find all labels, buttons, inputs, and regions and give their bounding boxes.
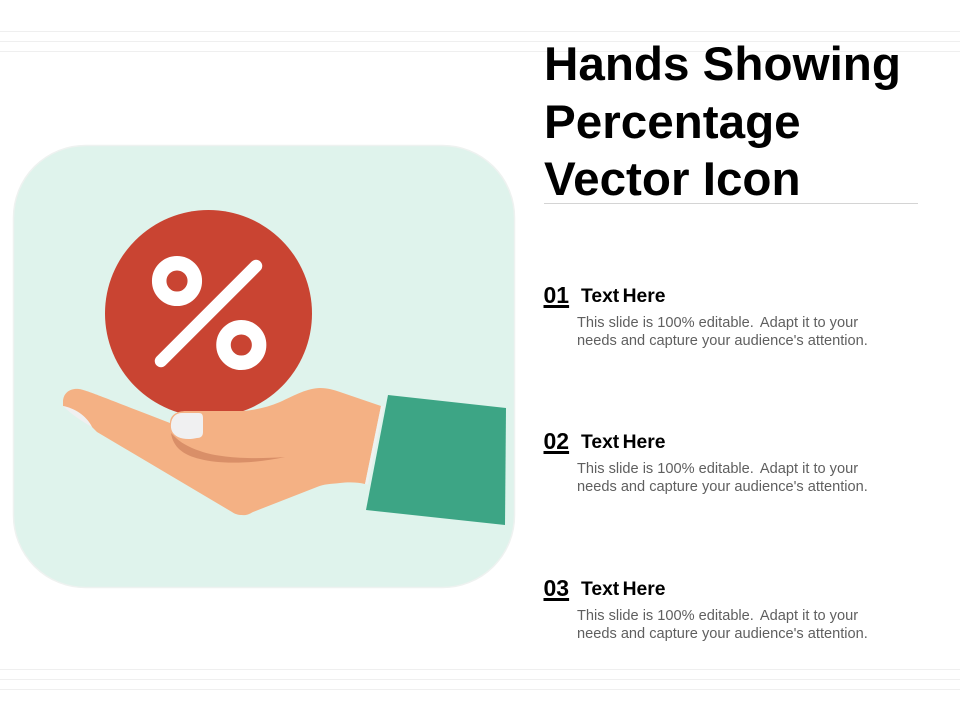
title — [544, 38, 901, 206]
text item 01: 01 — [544, 282, 569, 308]
title: Percentage — [544, 96, 801, 148]
text item 02: 02 — [544, 428, 569, 454]
text item 01: This slide is 100% editable. Adapt it to your — [577, 315, 858, 331]
text item 01: needs and capture your audience's attention. — [577, 333, 868, 349]
text item 02: Text Here — [581, 432, 665, 453]
text item 03: This slide is 100% editable. Adapt it to your — [577, 608, 858, 624]
title: Hands Showing — [544, 38, 901, 91]
text item 01 — [544, 282, 868, 349]
text item 03: Text Here — [581, 579, 665, 600]
text item 02: needs and capture your audience's attention. — [577, 479, 868, 495]
icon: green sleeve — [366, 395, 506, 525]
text item 01: Text Here — [581, 286, 665, 307]
icon: percent badge — [105, 210, 312, 417]
text item 03: 03 — [544, 575, 569, 601]
illustration: hand holding percentage — [12, 144, 516, 588]
text item 03: needs and capture your audience's attention. — [577, 626, 868, 642]
text item 02 — [544, 428, 868, 495]
panel: rounded background — [14, 146, 514, 588]
text item 03 — [544, 575, 868, 642]
icon: hand — [63, 388, 384, 515]
title: Vector Icon — [544, 153, 801, 206]
text item 02: This slide is 100% editable. Adapt it to your — [577, 461, 858, 477]
